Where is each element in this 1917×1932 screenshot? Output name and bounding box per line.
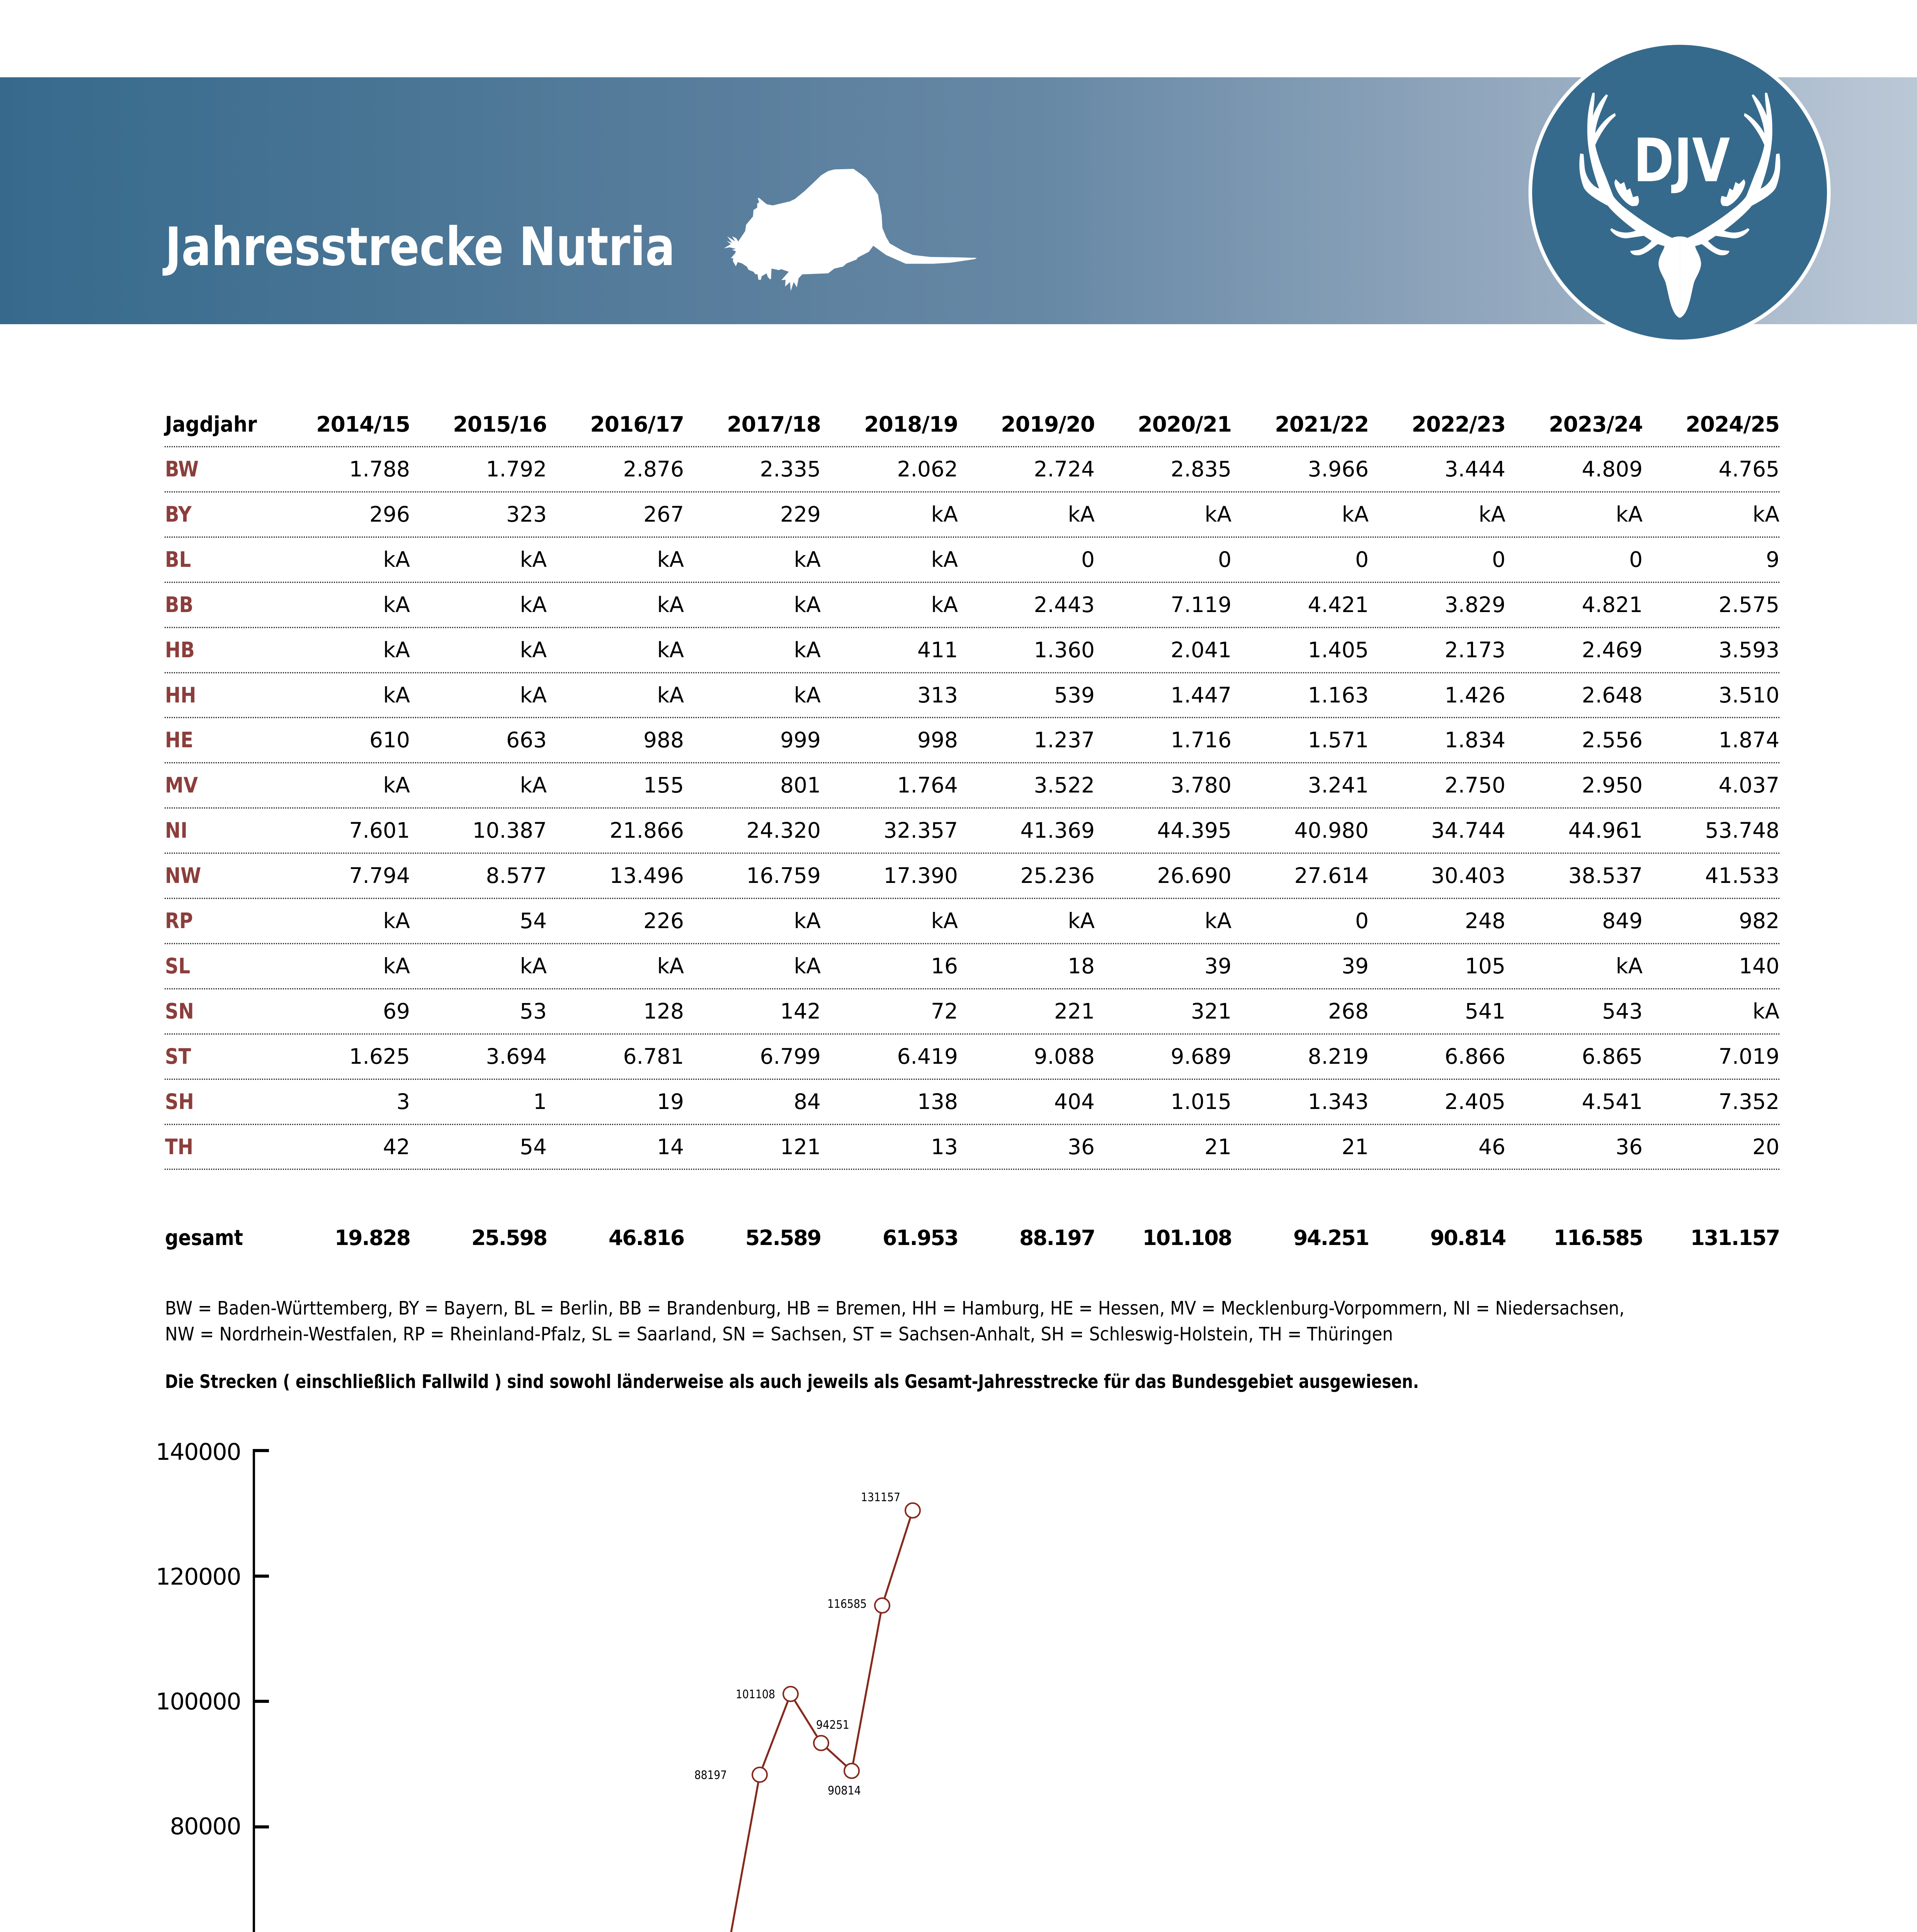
row MV: kA — [520, 773, 547, 798]
row MV: 3.241 — [1308, 773, 1369, 798]
row HB: 2.173 — [1445, 638, 1505, 662]
row BY: 323 — [506, 502, 547, 527]
row SN: 221 — [1054, 999, 1095, 1024]
row TH: 13 — [931, 1134, 958, 1159]
table header row: Jagdjahr — [163, 412, 257, 437]
row BW: BW — [165, 457, 199, 482]
row NI — [165, 818, 1779, 843]
row NI: 34.744 — [1431, 818, 1505, 843]
totals row: 90.814 — [1430, 1226, 1506, 1250]
row TH: 46 — [1478, 1134, 1505, 1159]
row SL: kA — [520, 954, 547, 978]
row TH: 121 — [780, 1134, 821, 1159]
row TH: 42 — [383, 1134, 410, 1159]
logo lettering: DJV — [1633, 126, 1730, 196]
row ST: 6.799 — [760, 1044, 821, 1069]
row SL: kA — [1616, 954, 1643, 978]
row BW: 4.765 — [1719, 457, 1779, 481]
row RP: 54 — [520, 908, 547, 933]
table row rules — [165, 447, 1779, 1169]
table header row: 2018/19 — [864, 412, 958, 437]
row SN: kA — [1753, 999, 1779, 1024]
row MV: 4.037 — [1719, 773, 1779, 798]
totals row: 52.589 — [745, 1226, 821, 1250]
row HH — [165, 683, 1779, 708]
totals row: 131.157 — [1690, 1226, 1779, 1250]
table header row: 2020/21 — [1138, 412, 1232, 437]
row RP: kA — [383, 908, 410, 933]
data labels: 94251 — [816, 1718, 849, 1732]
totals row: 116.585 — [1553, 1226, 1643, 1250]
row SH: 4.541 — [1582, 1089, 1643, 1114]
row BW: 3.444 — [1445, 457, 1505, 481]
row BB: BB — [165, 593, 193, 617]
row SN: 53 — [520, 999, 547, 1024]
row BL: BL — [165, 548, 191, 572]
row MV: 3.522 — [1034, 773, 1095, 798]
row MV: kA — [383, 773, 410, 798]
row NI: 24.320 — [747, 818, 821, 843]
row BB: kA — [657, 592, 684, 617]
y axis: 100000 — [156, 1688, 241, 1715]
row BW: 2.335 — [760, 457, 821, 481]
row NI: 40.980 — [1294, 818, 1369, 843]
row SH — [165, 1089, 1779, 1114]
row HE: 998 — [917, 728, 958, 752]
row BB: 4.421 — [1308, 592, 1369, 617]
row BW — [165, 457, 1779, 482]
row BL: kA — [383, 547, 410, 572]
row BW: 4.809 — [1582, 457, 1643, 481]
row SH: 7.352 — [1719, 1089, 1779, 1114]
row BW: 2.835 — [1171, 457, 1232, 481]
row BY — [165, 502, 1779, 527]
y axis — [156, 1439, 269, 1932]
row BB: 3.829 — [1445, 592, 1505, 617]
row NI: NI — [165, 818, 187, 843]
row RP: kA — [1068, 908, 1095, 933]
row SH: SH — [165, 1090, 194, 1114]
table header row: 2017/18 — [727, 412, 821, 437]
row HH: kA — [520, 683, 547, 707]
y axis: 140000 — [156, 1439, 241, 1466]
row BB: 2.443 — [1034, 592, 1095, 617]
row HH: kA — [383, 683, 410, 707]
row HB: kA — [520, 638, 547, 662]
table header row: 2014/15 — [316, 412, 410, 437]
row BW: 2.876 — [623, 457, 684, 481]
row BY: kA — [1205, 502, 1232, 527]
row HE: 663 — [506, 728, 547, 752]
row TH: 21 — [1204, 1134, 1232, 1159]
table header row: 2019/20 — [1001, 412, 1095, 437]
totals row: 88.197 — [1019, 1226, 1095, 1250]
data points — [446, 1503, 920, 1932]
row MV: 801 — [780, 773, 821, 798]
row MV: 155 — [643, 773, 684, 798]
row HB: 411 — [917, 638, 958, 662]
row BL: 0 — [1629, 547, 1643, 572]
table header row: 2021/22 — [1275, 412, 1369, 437]
row HH: 1.447 — [1171, 683, 1232, 707]
row HB: 2.469 — [1582, 638, 1643, 662]
row BB: 4.821 — [1582, 592, 1643, 617]
row SH: 19 — [657, 1089, 684, 1114]
row BW: 1.792 — [486, 457, 547, 481]
row ST — [165, 1044, 1779, 1069]
row HH: 1.163 — [1308, 683, 1369, 707]
row BB: kA — [383, 592, 410, 617]
row HE: HE — [165, 728, 193, 753]
row HH: kA — [794, 683, 821, 707]
row TH: 21 — [1342, 1134, 1369, 1159]
row SN: 321 — [1191, 999, 1232, 1024]
row BL: kA — [657, 547, 684, 572]
row BY: 229 — [780, 502, 821, 527]
row BW: 2.724 — [1034, 457, 1095, 481]
row HB: kA — [657, 638, 684, 662]
row HE: 1.834 — [1445, 728, 1505, 752]
row HB — [165, 638, 1779, 663]
row ST: 6.866 — [1445, 1044, 1505, 1069]
row BB — [165, 592, 1779, 617]
row HE: 1.874 — [1719, 728, 1779, 752]
row ST: 3.694 — [486, 1044, 547, 1069]
row HH: 539 — [1054, 683, 1095, 707]
row SH: 1.343 — [1308, 1089, 1369, 1114]
row BW: 3.966 — [1308, 457, 1369, 481]
row ST: 6.419 — [897, 1044, 958, 1069]
row ST: 1.625 — [349, 1044, 410, 1069]
row SH: 138 — [917, 1089, 958, 1114]
row NI: 7.601 — [349, 818, 410, 843]
line chart — [156, 1439, 957, 1932]
row TH — [165, 1134, 1779, 1160]
row RP: 849 — [1602, 908, 1643, 933]
row HH: 1.426 — [1445, 683, 1505, 707]
DJV logo badge — [1529, 41, 1831, 343]
totals row: 46.816 — [609, 1226, 684, 1250]
row BL: 0 — [1355, 547, 1369, 572]
row SN: 142 — [780, 999, 821, 1024]
row HH: 313 — [917, 683, 958, 707]
table header row: 2015/16 — [453, 412, 547, 437]
row BL: kA — [794, 547, 821, 572]
row ST: 7.019 — [1719, 1044, 1779, 1069]
row HH: 2.648 — [1582, 683, 1643, 707]
row BB: 7.119 — [1171, 592, 1232, 617]
row BY: kA — [1068, 502, 1095, 527]
row RP: kA — [1205, 908, 1232, 933]
row NW: 7.794 — [349, 863, 410, 888]
row BL: 0 — [1081, 547, 1095, 572]
row BY: kA — [1342, 502, 1369, 527]
row RP: 982 — [1739, 908, 1779, 933]
row ST: 9.689 — [1171, 1044, 1232, 1069]
legend of state abbreviations — [165, 1298, 1624, 1345]
row NI: 10.387 — [473, 818, 547, 843]
row ST: 6.781 — [623, 1044, 684, 1069]
row SH: 2.405 — [1445, 1089, 1505, 1114]
icon: nutria silhouette — [724, 169, 977, 291]
table header row: 2022/23 — [1412, 412, 1505, 437]
row SL: 18 — [1068, 954, 1095, 978]
row HE: 2.556 — [1582, 728, 1643, 752]
note on data: Die Strecken ( einschließlich Fallwild ) sind sowohl länderweise als auch jeweils als Gesamt-Jahresstrecke für das Bundesgebiet ausgewiesen. — [165, 1371, 1419, 1393]
row HE: 1.716 — [1171, 728, 1232, 752]
totals row: 61.953 — [883, 1226, 958, 1250]
row SL: 140 — [1739, 954, 1779, 978]
row HB: 2.041 — [1171, 638, 1232, 662]
row NW: 41.533 — [1705, 863, 1779, 888]
row TH: 20 — [1752, 1134, 1779, 1159]
row SL: 39 — [1204, 954, 1232, 978]
row BL — [165, 547, 1779, 572]
row BL: 0 — [1218, 547, 1232, 572]
totals row: 94.251 — [1293, 1226, 1369, 1250]
row SH: 1.015 — [1171, 1089, 1232, 1114]
row HE: 999 — [780, 728, 821, 752]
row BY: kA — [1616, 502, 1643, 527]
icon: antlers and stag skull — [1579, 93, 1780, 318]
row NI: 21.866 — [610, 818, 684, 843]
row MV: 3.780 — [1171, 773, 1232, 798]
data table — [163, 412, 1779, 1250]
row HE: 988 — [643, 728, 684, 752]
row BW: 1.788 — [349, 457, 410, 481]
row MV: 2.950 — [1582, 773, 1643, 798]
totals row: 19.828 — [335, 1226, 410, 1250]
row HH: HH — [165, 683, 196, 708]
row HE — [165, 728, 1779, 753]
data labels: 131157 — [861, 1491, 900, 1504]
row NI: 44.961 — [1568, 818, 1643, 843]
row MV: MV — [165, 773, 198, 798]
data labels: 101108 — [736, 1688, 775, 1701]
row BB: kA — [520, 592, 547, 617]
row BY: kA — [931, 502, 958, 527]
row BB: 2.575 — [1719, 592, 1779, 617]
row TH: 36 — [1068, 1134, 1095, 1159]
row BB: kA — [794, 592, 821, 617]
row ST: 6.865 — [1582, 1044, 1643, 1069]
row BY: 267 — [643, 502, 684, 527]
row NW: 17.390 — [884, 863, 958, 888]
row BL: kA — [520, 547, 547, 572]
row HH: 3.510 — [1719, 683, 1779, 707]
row TH: TH — [165, 1135, 193, 1160]
row SN: 69 — [383, 999, 410, 1024]
row ST: 8.219 — [1308, 1044, 1369, 1069]
row NW: 26.690 — [1157, 863, 1232, 888]
row TH: 36 — [1616, 1134, 1643, 1159]
row SL: kA — [657, 954, 684, 978]
row MV: 1.764 — [897, 773, 958, 798]
row BY: BY — [165, 502, 192, 527]
row MV: 2.750 — [1445, 773, 1505, 798]
data labels: 90814 — [828, 1784, 861, 1798]
row HB: kA — [383, 638, 410, 662]
row RP — [165, 908, 1779, 934]
row RP: 0 — [1355, 908, 1369, 933]
row SH: 3 — [396, 1089, 410, 1114]
row NW: 38.537 — [1568, 863, 1643, 888]
row RP: RP — [165, 909, 193, 934]
row NW: 27.614 — [1294, 863, 1369, 888]
row BY: 296 — [369, 502, 410, 527]
row BY: kA — [1479, 502, 1505, 527]
row BB: kA — [931, 592, 958, 617]
table header row — [163, 412, 1779, 437]
row HH: kA — [657, 683, 684, 707]
row BW: 2.062 — [897, 457, 958, 481]
row SN: SN — [165, 999, 194, 1024]
row HB: HB — [165, 638, 195, 663]
row RP: kA — [794, 908, 821, 933]
row RP: 248 — [1465, 908, 1505, 933]
row SL: 16 — [931, 954, 958, 978]
row HB: kA — [794, 638, 821, 662]
row HE: 610 — [369, 728, 410, 752]
row SN: 541 — [1465, 999, 1505, 1024]
row RP: 226 — [643, 908, 684, 933]
row NW: 30.403 — [1431, 863, 1505, 888]
row ST: 9.088 — [1034, 1044, 1095, 1069]
row SL: SL — [165, 954, 190, 979]
row SL: 105 — [1465, 954, 1505, 978]
table header row: 2016/17 — [590, 412, 684, 437]
table header row: 2023/24 — [1549, 412, 1643, 437]
row SH: 404 — [1054, 1089, 1095, 1114]
row MV — [165, 773, 1779, 798]
totals row — [165, 1225, 1779, 1250]
totals row: gesamt — [165, 1225, 243, 1250]
data labels: 88197 — [694, 1769, 727, 1782]
y axis: 80000 — [170, 1813, 241, 1840]
legend of state abbreviations: BW = Baden-Württemberg, BY = Bayern, BL = Berlin, BB = Brandenburg, HB = Bremen, HH = Hamburg, HE = Hessen, MV = Mecklenburg-Vorpommern, NI = Niedersachsen, — [165, 1298, 1624, 1319]
totals row: 101.108 — [1142, 1226, 1232, 1250]
row NW: 16.759 — [747, 863, 821, 888]
row HB: 1.405 — [1308, 638, 1369, 662]
data line — [453, 1510, 913, 1932]
row SN: 72 — [931, 999, 958, 1024]
row SL: 39 — [1342, 954, 1369, 978]
row NW: 8.577 — [486, 863, 547, 888]
row HB: 3.593 — [1719, 638, 1779, 662]
row SL — [165, 954, 1779, 979]
row SN: 128 — [643, 999, 684, 1024]
row RP: kA — [931, 908, 958, 933]
row SN — [165, 999, 1779, 1024]
row TH: 14 — [657, 1134, 684, 1159]
legend of state abbreviations: NW = Nordrhein-Westfalen, RP = Rheinland-Pfalz, SL = Saarland, SN = Sachsen, ST = Sachsen-Anhalt, SH = Schleswig-Holstein, TH = Thüringen — [165, 1323, 1393, 1345]
row HB: 1.360 — [1034, 638, 1095, 662]
row HE: 1.237 — [1034, 728, 1095, 752]
row TH: 54 — [520, 1134, 547, 1159]
row NI: 53.748 — [1705, 818, 1779, 843]
row SL: kA — [794, 954, 821, 978]
row SH: 84 — [794, 1089, 821, 1114]
row SN: 543 — [1602, 999, 1643, 1024]
row NW: NW — [165, 864, 201, 888]
data labels: 116585 — [827, 1597, 867, 1611]
row NW: 13.496 — [610, 863, 684, 888]
row SH: 1 — [533, 1089, 547, 1114]
row BL: kA — [931, 547, 958, 572]
row BL: 0 — [1492, 547, 1505, 572]
data labels — [413, 1491, 900, 1932]
row ST: ST — [165, 1044, 191, 1069]
row BL: 9 — [1766, 547, 1779, 572]
row HE: 1.571 — [1308, 728, 1369, 752]
row NI: 44.395 — [1157, 818, 1232, 843]
row BY: kA — [1753, 502, 1779, 527]
header banner — [0, 77, 1917, 324]
row SN: 268 — [1328, 999, 1369, 1024]
totals row: 25.598 — [471, 1226, 547, 1250]
table header row: 2024/25 — [1686, 412, 1779, 437]
row SL: kA — [383, 954, 410, 978]
y axis: 120000 — [156, 1563, 241, 1590]
row NW: 25.236 — [1021, 863, 1095, 888]
row NI: 41.369 — [1021, 818, 1095, 843]
row NW — [165, 863, 1779, 888]
row NI: 32.357 — [884, 818, 958, 843]
title: Jahresstrecke Nutria — [162, 216, 675, 278]
